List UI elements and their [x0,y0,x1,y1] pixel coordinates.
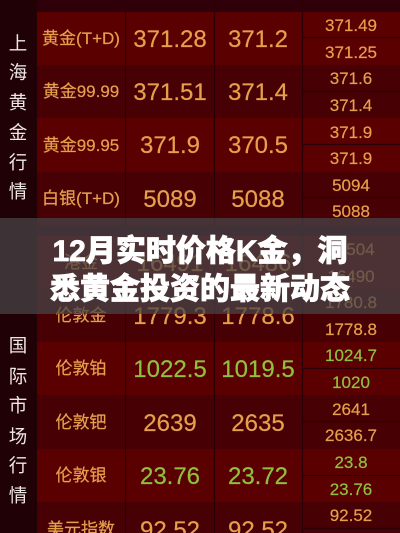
second price column: 1778.6 [221,303,295,330]
product names: 黄金99.99 [43,82,119,101]
high and low column: 371.9 [330,123,372,142]
product names: 港金 [64,253,98,272]
title band [0,218,400,314]
high and low column: 371.4 [330,96,372,115]
side label: Shanghai gold market: 黄 [9,92,27,113]
second price column [221,26,295,533]
high and low column: 16490 [327,267,375,286]
latest price column: 1022.5 [133,356,207,383]
side label: Shanghai gold market: 金 [9,122,27,143]
second price column: 5088 [231,186,285,213]
product names: 白银(T+D) [42,189,120,208]
product names: 伦敦钯 [56,413,106,432]
side label: Shanghai gold market: 行 [9,152,27,173]
side label: Shanghai gold market [9,33,27,202]
latest price column: 2639 [143,410,197,437]
high and low column: 371.6 [330,69,372,88]
latest price column: 371.51 [133,79,207,106]
title: 12月实时价格K金，洞 [52,235,348,268]
product names [42,29,120,533]
latest price column: 23.76 [140,463,200,490]
high and low column: 1780.8 [325,293,377,312]
second price column: 371.2 [228,26,288,53]
latest price column: 371.28 [133,26,207,53]
side label: international market: 际 [9,366,27,387]
side label: international market: 市 [9,395,27,416]
side label: Shanghai gold market: 海 [9,62,27,83]
latest price column: 1779.3 [133,303,207,330]
side label: Shanghai gold market: 情 [9,181,27,202]
high and low column: 2641 [332,400,370,419]
latest price column: 371.9 [140,132,200,159]
product names: 黄金(T+D) [42,29,120,48]
product names: 伦敦铂 [56,359,106,378]
high and low column [325,16,377,525]
high and low column: 16504 [327,240,375,259]
high and low column: 1024.7 [325,346,377,365]
high and low column: 371.25 [325,43,377,62]
product names: 伦敦金 [56,306,106,325]
high and low column: 5088 [332,202,370,221]
product names: 黄金99.95 [43,136,119,155]
side label: international market: 国 [9,335,27,356]
latest price column [133,26,207,533]
side label: Shanghai gold market: 上 [9,33,27,54]
side label: international market [9,335,27,506]
side label: international market: 情 [9,485,27,506]
product names: 伦敦银 [56,466,106,485]
high and low column: 23.8 [334,453,368,472]
high and low column: 371.49 [325,16,377,35]
second price column: 371.4 [228,79,288,106]
second price column: 16486 [225,250,291,277]
second price column: 1019.5 [221,356,295,383]
side label: international market: 场 [9,426,27,447]
high and low column: 1020 [332,373,370,392]
high and low column: 92.52 [330,506,372,525]
second price column: 23.72 [228,463,288,490]
latest price column: 16491 [137,250,203,277]
title [50,234,350,306]
title: 悉黄金投资的最新动态 [50,273,350,306]
high and low column: 2636.7 [325,426,377,445]
second price column: 370.5 [228,132,288,159]
side label: international market: 行 [9,455,27,476]
high and low column: 1778.8 [325,320,377,339]
high and low column: 23.76 [330,480,372,499]
high and low column: 5094 [332,176,370,195]
high and low column: 371.9 [330,149,372,168]
latest price column: 5089 [143,186,197,213]
second price column: 2635 [231,410,285,437]
